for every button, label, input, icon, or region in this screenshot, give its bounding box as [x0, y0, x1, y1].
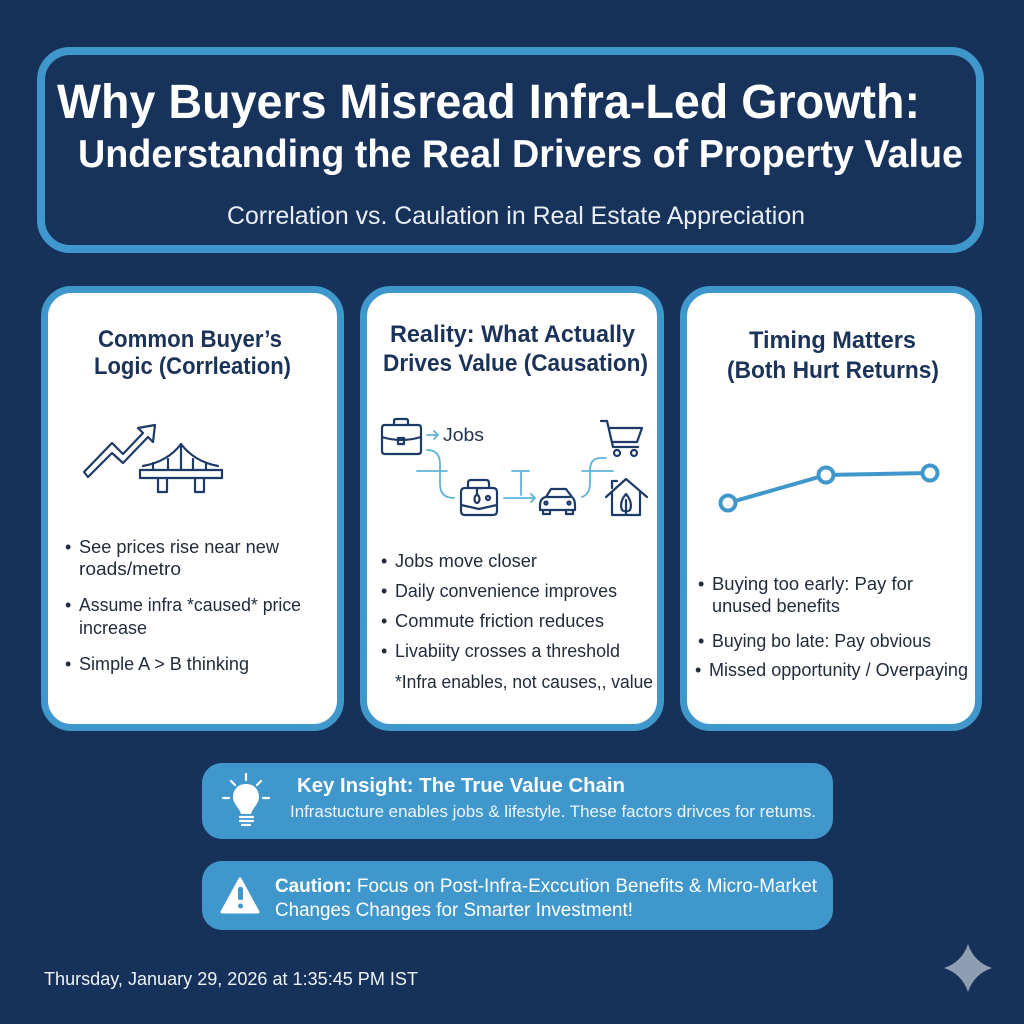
panel heading: (Both Hurt Returns) [727, 357, 939, 384]
bullet list: • [381, 581, 387, 601]
icon: house with leaf [606, 479, 647, 515]
bullet list: Missed opportunity / Overpaying [709, 660, 968, 680]
connector: briefcase to bag [417, 450, 454, 498]
footnote: *Infra enables, not causes,, value [395, 672, 653, 692]
panel: reality [364, 290, 660, 728]
bullet list: Commute friction reduces [395, 611, 604, 631]
bullet list: Buying too early: Pay for [712, 574, 913, 594]
bullet list: Assume infra *caused* price [79, 595, 301, 615]
bullet list: roads/metro [79, 559, 181, 579]
panel heading [383, 321, 648, 377]
icon: sparkle [944, 944, 992, 992]
bullet list: Buying bo late: Pay obvious [712, 631, 931, 651]
bullet list: • [65, 595, 71, 615]
bullet list: • [65, 537, 71, 557]
bullet list [65, 537, 301, 674]
icon: rising arrow and bridge [84, 425, 222, 492]
bullet list: See prices rise near new [79, 537, 280, 557]
bullet list: • [381, 611, 387, 631]
bullet list: Jobs move closer [395, 551, 537, 571]
timestamp: Thursday, January 29, 2026 at 1:35:45 PM IST [44, 969, 418, 989]
callout heading: Key Insight: The True Value Chain [297, 775, 625, 797]
bullet list: Livabiity crosses a threshold [395, 641, 620, 661]
panel heading: Logic (Corrleation) [94, 353, 291, 380]
callout: caution [202, 861, 833, 930]
panel: common buyer's logic [44, 290, 340, 728]
bullet list: increase [79, 618, 147, 638]
bullet list: unused benefits [712, 596, 840, 616]
icon: warning triangle [222, 879, 258, 912]
panel: timing matters [684, 290, 978, 728]
panel heading [727, 327, 939, 384]
arrow to jobs [427, 431, 438, 439]
label: jobs: Jobs [443, 425, 484, 445]
heading line 2: Understanding the Real Drivers of Property Value [78, 133, 963, 176]
icon: light bulb [223, 774, 269, 825]
callout text: Infrastucture enables jobs & lifestyle. These factors drivces for retums. [290, 802, 816, 821]
caution text: Caution: Focus on Post-Infra-Exccution Benefits & Micro-Market [275, 876, 818, 897]
bullet list: • [695, 660, 701, 680]
caution text: Changes Changes for Smarter Investment! [275, 900, 633, 921]
bullet list: • [381, 551, 387, 571]
panel heading: Reality: What Actually [390, 321, 636, 348]
connector: car to destinations [582, 458, 613, 497]
subtitle: Correlation vs. Caulation in Real Estate Appreciation [227, 202, 805, 230]
line chart: timing [720, 466, 938, 510]
panel heading: Drives Value (Causation) [383, 350, 648, 377]
bullet list: • [698, 574, 704, 594]
panel heading: Common Buyer’s [98, 326, 282, 353]
bullet list: • [65, 654, 71, 674]
callout: key insight [202, 763, 833, 839]
caution text [275, 876, 818, 921]
icon: shopping cart [601, 421, 642, 456]
bullet list [695, 574, 968, 680]
title panel [41, 51, 980, 249]
panel heading [94, 326, 291, 380]
bullet list: • [381, 641, 387, 661]
connector: bag to car [504, 471, 535, 502]
heading line 1: Why Buyers Misread Infra-Led Growth: [57, 76, 920, 129]
bullet list: Daily convenience improves [395, 581, 617, 601]
bullet list: • [698, 631, 704, 651]
icon: work bag [461, 480, 497, 515]
icon: briefcase [382, 419, 421, 454]
flow diagram: value chain icons [382, 419, 647, 515]
bullet list [381, 551, 653, 692]
icon: car [540, 489, 575, 514]
bullet list: Simple A > B thinking [79, 654, 249, 674]
panel heading: Timing Matters [749, 327, 916, 354]
